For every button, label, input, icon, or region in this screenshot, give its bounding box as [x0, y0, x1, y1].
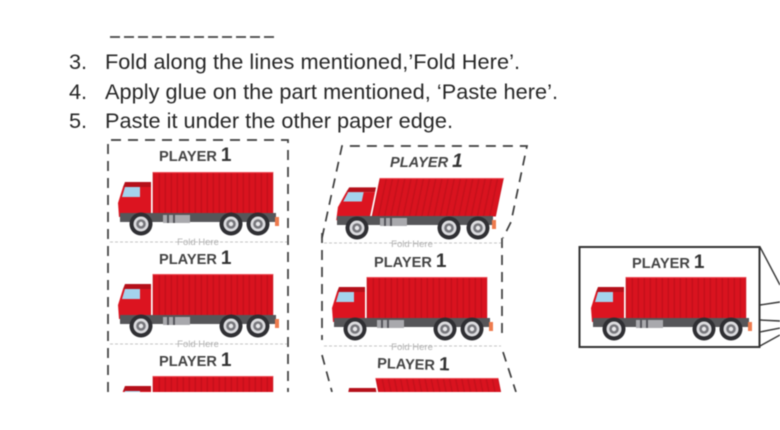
player label 2: PLAYER 1: [374, 251, 447, 272]
truck 2: [118, 274, 279, 338]
player label 3: PLAYER 1: [159, 350, 232, 371]
panel: folded strip of player cards: [322, 146, 527, 423]
cut lines: [108, 140, 288, 392]
truck skewed: [335, 178, 504, 240]
truck 2: [332, 277, 493, 340]
panel: flat strip of player cards: [108, 140, 288, 430]
player label 2: PLAYER 1: [159, 248, 232, 269]
paste flaps: [760, 247, 780, 346]
top dashed line: [110, 36, 275, 38]
player label 3: PLAYER 1: [377, 352, 450, 376]
panel: single pasted card: [580, 247, 780, 347]
instruction steps: [69, 49, 558, 133]
truck 3: [340, 378, 507, 423]
card border: [580, 247, 760, 347]
player label: PLAYER 1: [632, 252, 705, 273]
fold line 1: Fold Here: [391, 239, 433, 250]
cut lines: [322, 146, 527, 392]
step 3: 3.: [69, 49, 87, 74]
truck: [591, 277, 752, 340]
fold line 2: Fold Here: [391, 342, 433, 353]
step 3: Fold along the lines mentioned,’Fold Here’.: [105, 49, 520, 74]
bottom page mask: [0, 392, 780, 430]
step 4: 4.: [69, 79, 87, 104]
player label skewed: PLAYER 1: [390, 151, 463, 172]
step 5: Paste it under the other paper edge.: [105, 108, 453, 133]
fold line 2: Fold Here: [177, 339, 219, 350]
fold line 1: Fold Here: [177, 237, 219, 248]
step 5: 5.: [69, 108, 87, 133]
step 4: Apply glue on the part mentioned, ‘Paste here’.: [105, 79, 558, 104]
player label 1: PLAYER 1: [159, 145, 232, 166]
truck 3: [118, 376, 279, 430]
truck 1: [118, 172, 279, 236]
